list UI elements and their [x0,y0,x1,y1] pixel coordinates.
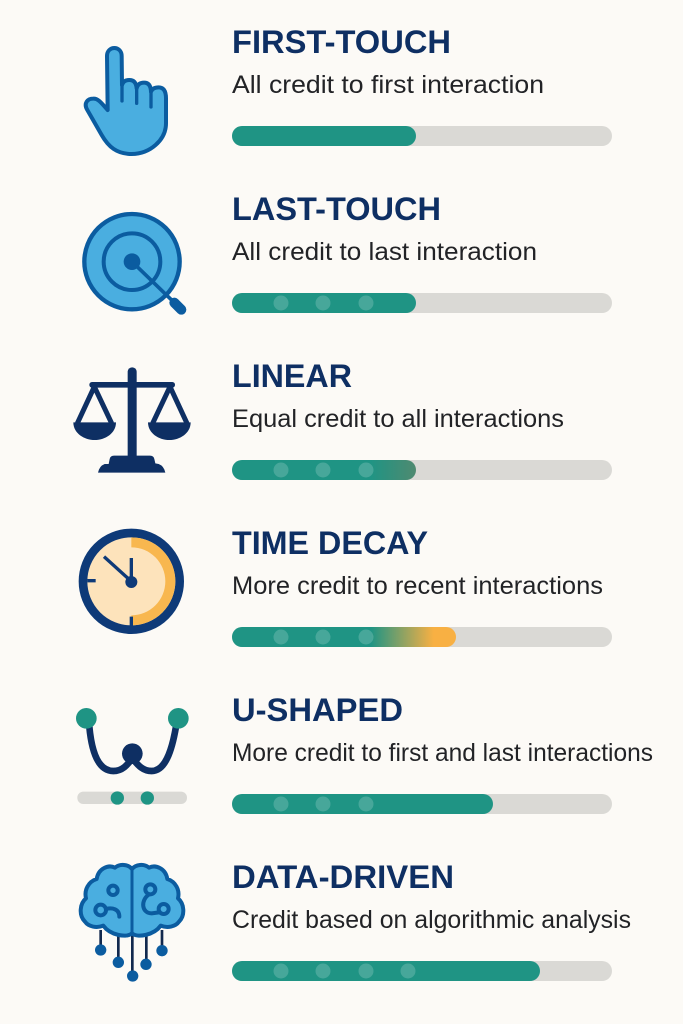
icon: pointing hand [86,48,166,154]
panel: data-driven [81,859,631,982]
icon: balance scales [73,367,191,473]
heading: last-touch: LAST-TOUCH [232,191,441,227]
panel: first-touch [86,24,612,154]
heading: first-touch: FIRST-TOUCH [232,24,451,60]
heading: u-shaped: U-SHAPED [232,692,403,728]
progress bar: linear [232,460,612,480]
icon: clock [83,533,180,630]
progress bar: data-driven [232,961,612,981]
heading: data-driven: DATA-DRIVEN [232,859,454,895]
icon: target [84,214,181,310]
progress bar: u-shaped [232,794,612,814]
panel: time decay [83,525,612,647]
heading: time decay: TIME DECAY [232,525,428,561]
panel: linear [73,358,612,480]
icon: circuit brain [81,865,183,982]
icon: u-shaped curve [76,708,189,805]
text: u-shaped description: More credit to first and last interactions [232,739,653,767]
text: first-touch description: All credit to first interaction [232,71,544,99]
progress bar: last-touch [232,293,612,313]
text: time decay description: More credit to recent interactions [232,572,603,600]
progress bar: time decay [232,627,612,647]
progress bar: first-touch [232,126,612,146]
text: linear description: Equal credit to all interactions [232,405,564,433]
heading: linear: LINEAR [232,358,352,394]
panel: u-shaped [76,692,653,814]
text: last-touch description: All credit to last interaction [232,238,537,266]
panel: last-touch [84,191,612,313]
text: data-driven description: Credit based on algorithmic analysis [232,906,631,934]
